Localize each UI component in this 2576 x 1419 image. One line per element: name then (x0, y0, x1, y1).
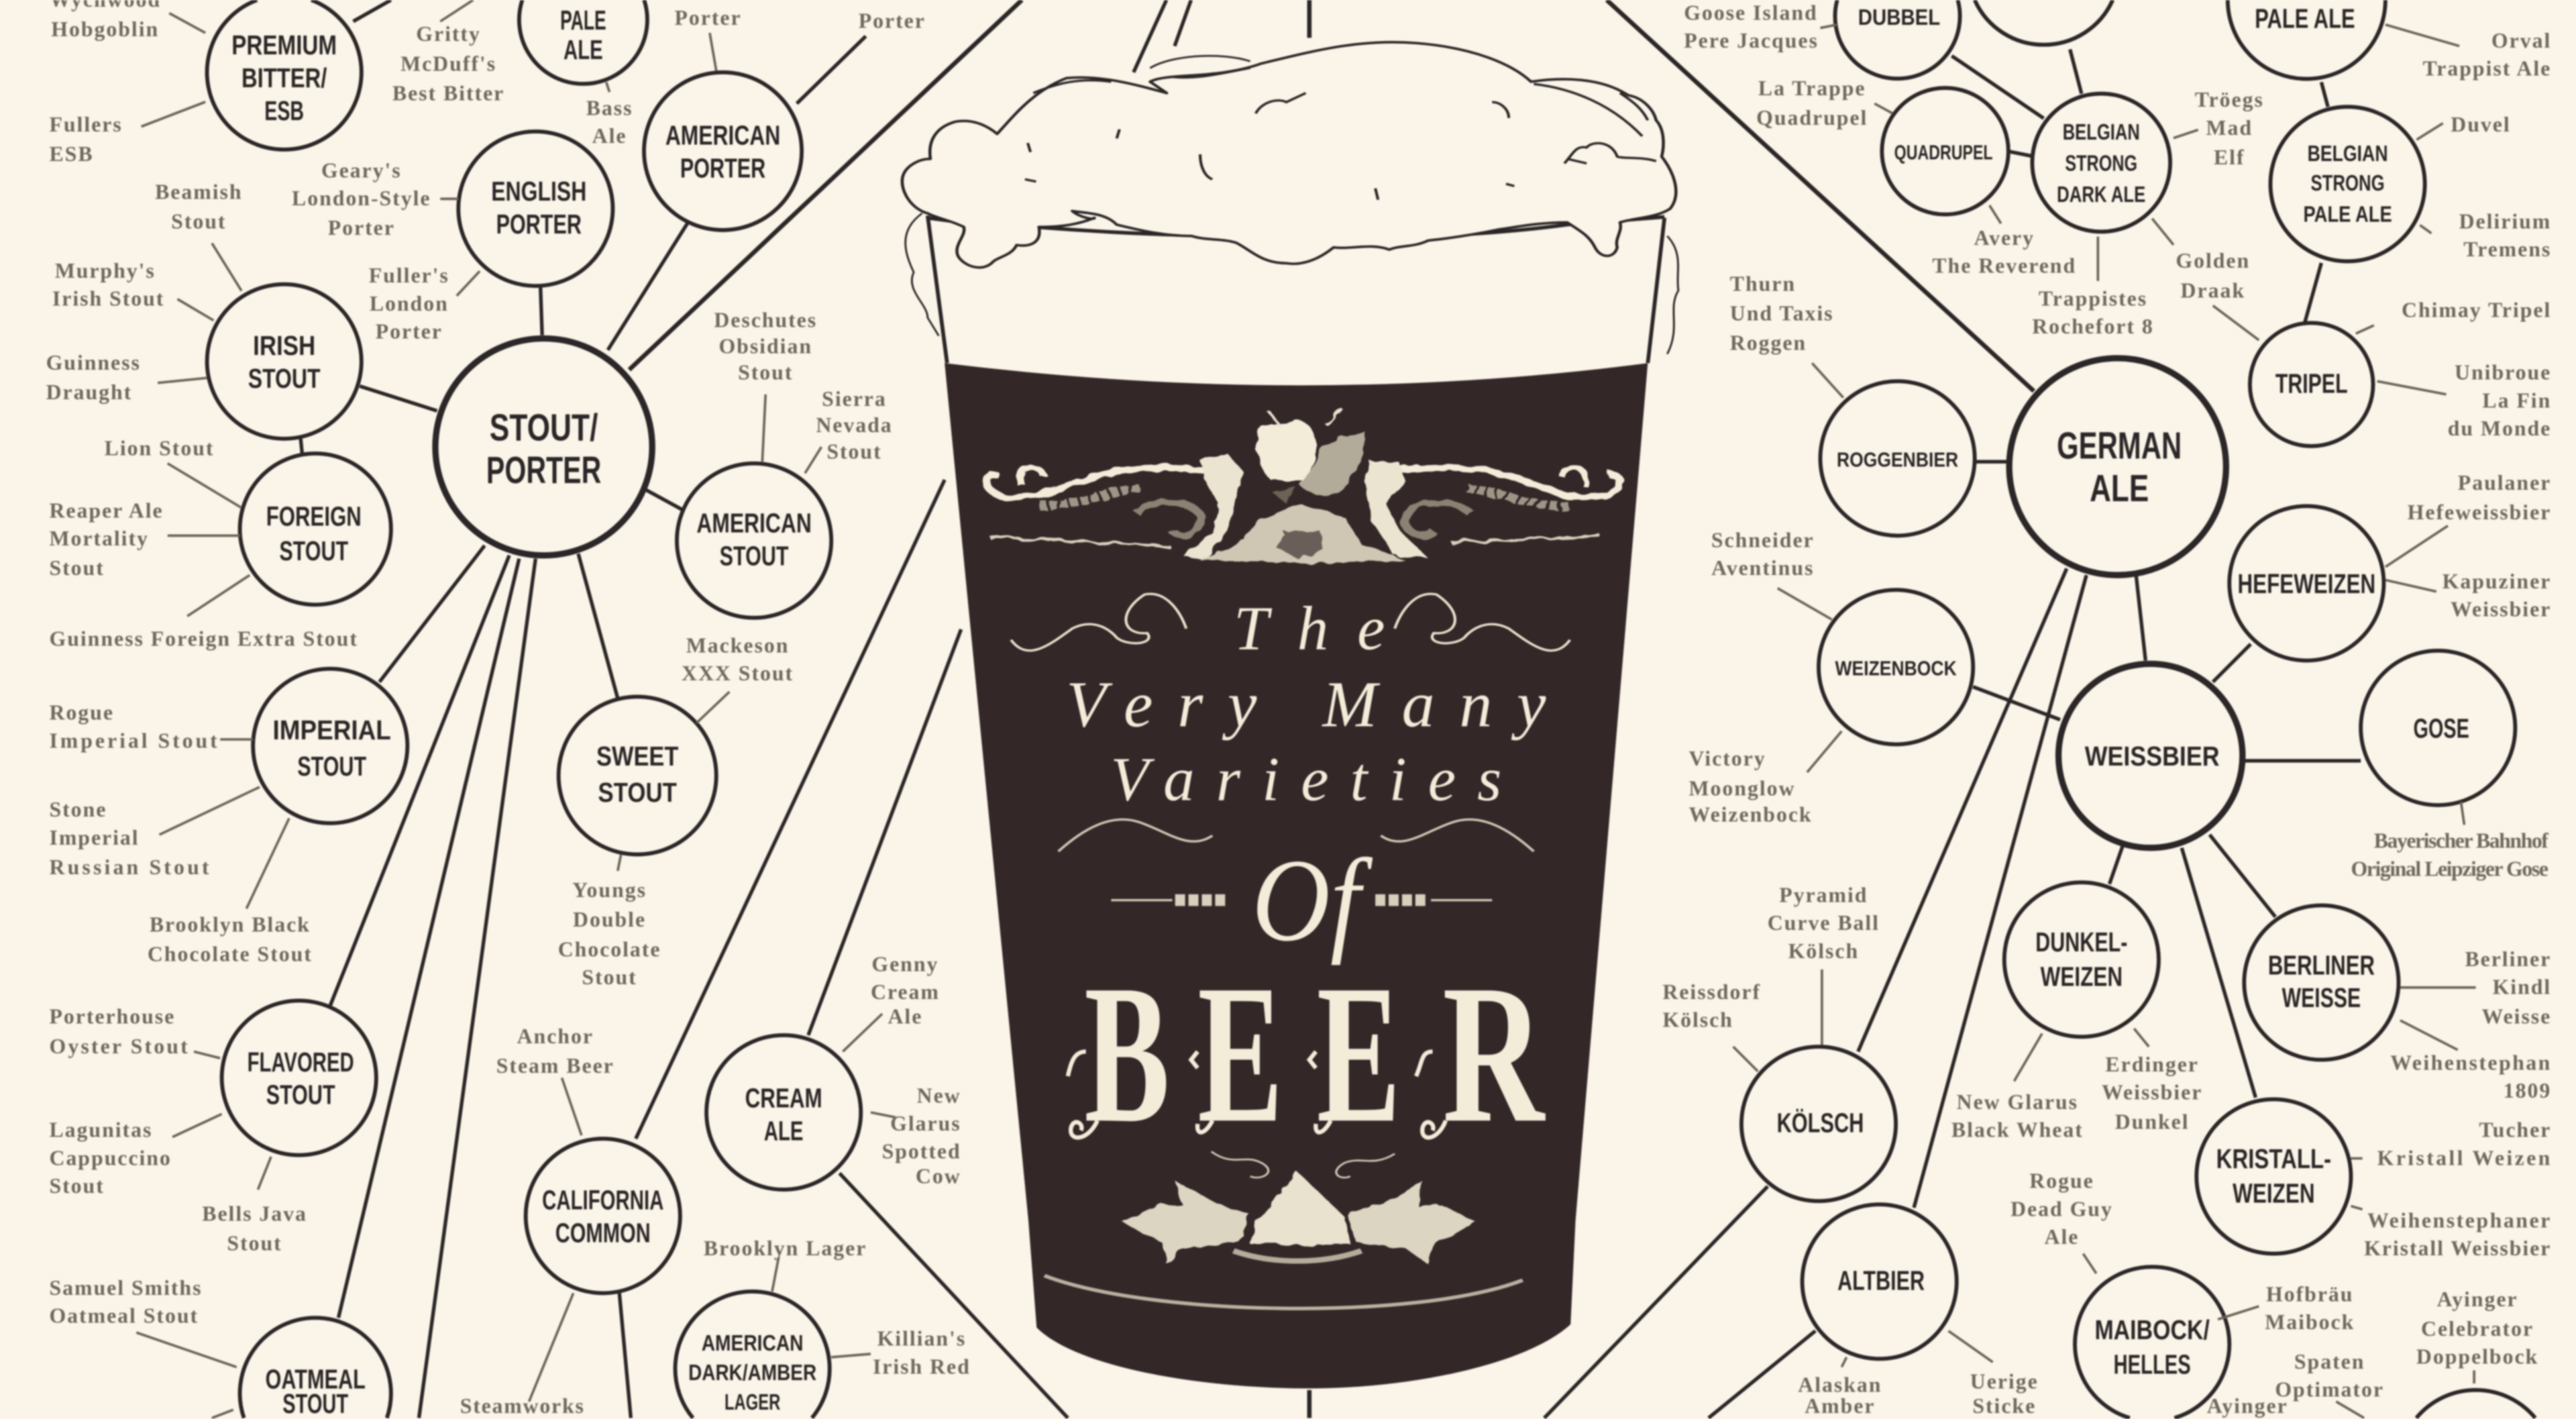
varieties: American Dark/Amber Lager: Killian's (877, 1327, 966, 1351)
node: Belgian Strong Dark Ale (1932, 88, 2264, 338)
node: Cream Ale: CREAM (745, 1083, 822, 1114)
varieties: Maibock: Dead Guy (2010, 1197, 2113, 1220)
varieties: Roggenbier: Roggen (1730, 331, 1807, 355)
varieties: Altbier: Amber (1805, 1394, 1875, 1418)
node: Weissbier hub (2059, 664, 2243, 848)
varieties: American Stout: Stout (738, 361, 793, 384)
varieties: American Porter (674, 6, 926, 70)
node: Cream Ale: ALE (764, 1116, 804, 1147)
node: American Dark/Amber Lager: DARK/AMBER (688, 1361, 816, 1385)
node: Maibock / Helles (2010, 1169, 2384, 1418)
varieties: English Porter: London (370, 292, 449, 315)
varieties: Maibock (2010, 1169, 2384, 1418)
varieties: Maibock: Rogue (2029, 1169, 2094, 1193)
varieties: Maibock: Ale (2045, 1225, 2079, 1249)
node: Altbier: ALTBIER (1837, 1265, 1925, 1296)
node: American Stout (677, 308, 893, 618)
node: Gose (2351, 651, 2550, 880)
varieties: Weizenbock (1689, 529, 1841, 827)
node: Dubbel (1684, 0, 1960, 78)
varieties: American Stout: Deschutes (714, 308, 817, 331)
varieties: Irish Stout: Draught (46, 380, 132, 404)
title text: BEER: R (1442, 944, 1546, 1164)
varieties: Sweet Stout: Chocolate (558, 937, 661, 961)
node: American Stout: STOUT (720, 540, 789, 571)
varieties: Imperial Stout: Chocolate Stout (148, 943, 313, 966)
varieties: Weizenbock: Victory (1689, 747, 1766, 770)
node: Belgian Strong Dark Ale: BELGIAN (2063, 120, 2140, 145)
varieties: Cream Ale: Cream (871, 980, 940, 1004)
node: Irish Stout: STOUT (248, 363, 321, 394)
node: Imperial Stout (49, 669, 407, 966)
node: American Dark/Amber Lager (676, 1237, 971, 1418)
varieties: Belgian Strong Dark Ale: Draak (2181, 278, 2245, 302)
varieties: American Stout: Obsidian (718, 335, 812, 358)
node: Oatmeal Stout: OATMEAL (266, 1363, 366, 1394)
icon: beer body (945, 363, 1648, 1388)
varieties: Berliner Weisse: Berliner (2465, 947, 2551, 971)
varieties: English Porter: Geary's (321, 159, 402, 182)
varieties: California Common: Steam Beer (496, 1054, 614, 1078)
title text: The Very Many Varieties: Very Many (1066, 668, 1546, 741)
varieties: Quadrupel: Quadrupel (1756, 106, 1868, 129)
varieties: Oatmeal Stout: Samuel Smiths (49, 1276, 202, 1300)
node: Kölsch (1662, 884, 1896, 1201)
varieties: Oatmeal Stout: Oatmeal Stout (49, 1304, 199, 1327)
varieties: Kölsch: Reissdorf (1662, 980, 1761, 1004)
varieties: Kristallweizen: Weihenstephaner (2367, 1208, 2551, 1232)
node: California Common: COMMON (555, 1217, 651, 1248)
node: Dunkelweizen: DUNKEL- (2035, 927, 2127, 957)
left scroll (986, 454, 1244, 560)
node: Irish Stout: IRISH (253, 330, 315, 361)
varieties: English Porter: Porter (376, 320, 443, 344)
varieties: Sweet Stout (558, 633, 794, 989)
varieties: Berliner Weisse: Kindl (2493, 976, 2551, 999)
varieties: Imperial Stout: Imperial (49, 826, 140, 849)
node: Premium Bitter / ESB: ESB (264, 95, 304, 126)
varieties: Cream Ale: Ale (888, 1005, 922, 1029)
flourishes and arrows around Of (1059, 819, 1534, 900)
varieties: Imperial Stout (49, 701, 313, 966)
varieties: Cream Ale: Glarus (890, 1112, 961, 1135)
varieties: Kölsch: Kölsch (1788, 939, 1859, 963)
node: Roggenbier (1730, 272, 1975, 535)
varieties: Belgian Strong Dark Ale: Rochefort 8 (2032, 315, 2154, 338)
varieties: Belgian Strong Dark Ale: Golden (2176, 249, 2250, 272)
node: Premium Bitter / ESB: BITTER/ (241, 62, 327, 93)
varieties: English Porter: Porter (328, 216, 395, 240)
varieties: Belgian Pale Ale: Orval (2491, 29, 2551, 52)
varieties: English Porter: Fuller's (369, 264, 449, 287)
varieties: Hefeweizen: Paulaner (2458, 471, 2551, 494)
varieties: Irish Stout: Irish Stout (52, 287, 164, 311)
varieties: Premium Bitter: McDuff's (400, 52, 496, 75)
node: Tripel (2250, 299, 2551, 446)
node: Sweet Stout: STOUT (598, 777, 677, 808)
varieties: Hefeweizen (2385, 471, 2551, 621)
node: Stout / Porter hub: PORTER (486, 449, 601, 491)
node: Flavored Stout (49, 1000, 376, 1255)
varieties: Weizenbock: Schneider (1711, 529, 1815, 552)
varieties: Irish Stout (46, 180, 243, 404)
node: Belgian Strong Pale Ale: BELGIAN (2308, 142, 2388, 166)
varieties: Foreign Stout: Reaper Ale (49, 498, 164, 522)
icon: letter spurs and curls (1068, 1051, 1446, 1138)
title text: BEER: E (1197, 944, 1283, 1164)
node: Weizenbock (1689, 529, 1973, 827)
varieties: Weizenbock: Aventinus (1711, 556, 1814, 580)
varieties: Hefeweizen: Kapuziner (2443, 570, 2551, 593)
varieties: Kristallweizen: Kristall Weissbier (2364, 1237, 2551, 1260)
varieties: California Common (460, 1024, 614, 1418)
varieties: Belgian Strong Dark Ale: Elf (2214, 146, 2245, 169)
varieties: Weizenbock: Weizenbock (1689, 803, 1813, 827)
varieties: Premium Bitter: Hobgoblin (51, 17, 159, 41)
node: German Ale hub: ALE (2090, 467, 2149, 509)
varieties: Belgian Strong Dark Ale: Mad (2206, 116, 2253, 140)
varieties: Imperial Stout: Imperial Stout (49, 729, 219, 752)
node: Pale Ale (Belgian) (2228, 0, 2551, 81)
varieties: Gose (2351, 802, 2550, 880)
varieties: Belgian Strong Dark Ale: The Reverend (1932, 254, 2076, 278)
node: Belgian Strong Pale Ale: PALE ALE (2303, 203, 2392, 227)
node: Imperial Stout: IMPERIAL (273, 715, 391, 745)
title flourishes (1011, 594, 1570, 651)
varieties: Belgian Strong Pale Ale (2213, 113, 2551, 340)
varieties: Maibock: Optimator (2275, 1378, 2384, 1402)
varieties: Kölsch: Curve Ball (1768, 911, 1880, 935)
node: Weizenbock: WEIZENBOCK (1835, 658, 1957, 680)
varieties: Berliner Weisse: 1809 (2504, 1079, 2551, 1102)
varieties: Imperial Stout: Rogue (49, 701, 114, 725)
varieties: American Dark/Amber Lager: Brooklyn Lager (704, 1237, 867, 1260)
varieties: Cream Ale: New (917, 1084, 961, 1107)
varieties: Flavored Stout (49, 1005, 307, 1255)
varieties: Roggenbier: Thurn (1730, 272, 1796, 296)
node: Maibock / Helles: HELLES (2114, 1349, 2191, 1379)
node: Dunkelweizen (1951, 882, 2202, 1142)
node: American Dark/Amber Lager: AMERICAN (702, 1331, 804, 1356)
node: American Porter (644, 6, 926, 230)
varieties: Tripel: La Fin (2482, 388, 2551, 412)
node: German Ale hub: GERMAN (2057, 424, 2182, 466)
node: Hefeweizen (2229, 471, 2551, 661)
varieties: Oatmeal Stout (49, 1276, 237, 1418)
varieties: Flavored Stout: Stout (227, 1232, 282, 1255)
varieties: Dubbel (1684, 1, 1837, 52)
varieties: American Porter: Porter (859, 9, 926, 33)
varieties: Pale Ale: Ale (592, 124, 627, 148)
varieties: Dunkelweizen: New Glarus (1957, 1090, 2078, 1114)
node: Hefeweizen: HEFEWEIZEN (2238, 568, 2375, 599)
title text: The Very Many Varieties (1066, 594, 1546, 814)
varieties: Altbier (1798, 1331, 2039, 1418)
node: Weissbier hub: WEISSBIER (2085, 741, 2220, 772)
title text: The Very Many Varieties: Varieties (1111, 745, 1501, 814)
varieties: Maibock: Ayinger (2207, 1394, 2288, 1418)
node: Belgian Strong Dark Ale: STRONG (2065, 152, 2137, 176)
varieties: American Dark/Amber Lager: Irish Red (873, 1355, 971, 1378)
node: English Porter (292, 132, 612, 344)
varieties: Premium Bitter: ESB (49, 142, 94, 166)
varieties: Weizenbock: Moonglow (1689, 776, 1795, 800)
node: Berliner Weisse: WEISSE (2282, 982, 2361, 1013)
glass of beer illustration (902, 42, 1678, 1388)
varieties: California Common: Anchor (517, 1024, 594, 1048)
varieties: Quadrupel (1756, 76, 1892, 129)
node: Dunkelweizen: WEIZEN (2041, 961, 2123, 992)
varieties: Belgian Strong Dark Ale: Tröegs (2195, 88, 2264, 111)
node: German Ale hub (2009, 358, 2226, 575)
varieties: Dubbel: Goose Island (1684, 1, 1818, 24)
node: Doppelbock (2416, 1287, 2538, 1418)
node: Foreign Stout (49, 436, 391, 650)
varieties: Foreign Stout (49, 436, 358, 650)
varieties: Roggenbier (1730, 272, 1843, 398)
varieties: Kölsch: Kölsch (1662, 1008, 1733, 1032)
varieties: Kölsch: Pyramid (1779, 884, 1868, 907)
varieties: Imperial Stout: Stone (49, 798, 107, 821)
varieties: Gose: Original Leipziger Gose (2351, 857, 2550, 880)
varieties: Belgian Pale Ale: Trappist Ale (2422, 57, 2551, 81)
node: Cream Ale (706, 952, 961, 1190)
node: American Dark/Amber Lager: LAGER (724, 1390, 780, 1415)
node: Pale Ale (English): PALE (560, 5, 606, 36)
node: Quadrupel: QUADRUPEL (1894, 142, 1993, 164)
node: Oatmeal Stout: STOUT (282, 1388, 348, 1419)
glass base highlight (1044, 1275, 1523, 1308)
title text: BEER: E (1317, 944, 1401, 1164)
varieties: Hefeweizen: Hefeweissbier (2408, 501, 2551, 524)
node: Quadrupel (1756, 76, 2008, 215)
node: American Porter: AMERICAN (665, 120, 780, 151)
varieties: Irish Stout: Murphy's (55, 259, 156, 282)
varieties: Altbier: Alaskan (1798, 1373, 1882, 1396)
varieties: Cream Ale (843, 952, 961, 1188)
varieties: Altbier: Sticke (1972, 1394, 2036, 1418)
varieties: Maibock: Maibock (2265, 1310, 2355, 1334)
varieties: Flavored Stout: Lagunitas (49, 1118, 152, 1142)
varieties: Kristallweizen (2351, 1118, 2551, 1260)
varieties: Kölsch (1662, 884, 1880, 1071)
varieties: English Porter (292, 159, 480, 344)
varieties: Tripel: du Monde (2448, 417, 2551, 440)
varieties: Quadrupel: La Trappe (1758, 76, 1866, 100)
varieties: Doppelbock: Ayinger (2437, 1287, 2518, 1311)
node: Stout / Porter hub: STOUT/ (490, 406, 598, 448)
node: Kölsch: KÖLSCH (1777, 1107, 1864, 1138)
node: Partly cropped Belgian style (1975, 0, 2112, 45)
varieties: Dunkelweizen: Black Wheat (1951, 1118, 2084, 1142)
title text: Of: Of (1252, 835, 1373, 966)
varieties: Kristallweizen: Kristall Weizen (2377, 1146, 2551, 1169)
icon: foam (902, 42, 1676, 268)
varieties: American Stout: Sierra (822, 387, 887, 411)
varieties: Belgian Strong Pale Ale: Tremens (2463, 238, 2551, 261)
varieties: Irish Stout: Beamish (155, 180, 243, 203)
node: Foreign Stout: FOREIGN (266, 501, 362, 532)
node: Altbier (1798, 1204, 2039, 1418)
node: Gose: GOSE (2414, 713, 2469, 744)
varieties: Foreign Stout: Lion Stout (105, 436, 214, 460)
varieties: Hefeweizen: Weissbier (2451, 597, 2551, 621)
varieties: Pale Ale: Bass (586, 96, 633, 119)
varieties: Belgian Strong Pale Ale: Delirium (2459, 209, 2551, 233)
node: Stout / Porter hub (435, 339, 652, 556)
varieties: Foreign Stout: Mortality (49, 527, 149, 550)
varieties: Roggenbier: Und Taxis (1730, 302, 1834, 325)
varieties: Berliner Weisse: Weihenstephan (2390, 1051, 2551, 1074)
node: Maibock / Helles: MAIBOCK/ (2094, 1314, 2210, 1345)
varieties: Dunkelweizen (1951, 1029, 2202, 1142)
varieties: Premium Bitter: Best Bitter (392, 81, 504, 105)
title text: BEER (1068, 944, 1546, 1164)
varieties: Flavored Stout: Cappuccino (49, 1146, 172, 1169)
varieties: Cream Ale: Genny (871, 952, 938, 976)
node: Belgian Strong Pale Ale (2213, 107, 2551, 340)
node: Kristallweizen: KRISTALL- (2216, 1143, 2331, 1174)
varieties: Premium Bitter (49, 0, 504, 166)
node: American Porter: PORTER (680, 153, 765, 184)
node: Pale Ale (English): ALE (564, 34, 603, 65)
varieties: American Porter: Porter (674, 6, 742, 30)
varieties: Sweet Stout: Mackeson (686, 633, 789, 657)
node: Berliner Weisse: BERLINER (2268, 949, 2375, 980)
varieties: Tripel: Unibroue (2455, 361, 2551, 384)
node: American Stout: AMERICAN (696, 508, 812, 539)
varieties: Irish Stout: Guinness (46, 351, 141, 374)
top ornament: hops and scrollwork (986, 409, 1619, 563)
node: Kristallweizen: WEIZEN (2233, 1178, 2315, 1209)
varieties: Flavored Stout: Oyster Stout (49, 1035, 189, 1058)
title text: The Very Many Varieties: The (1234, 594, 1385, 663)
varieties: Flavored Stout: Porterhouse (49, 1005, 175, 1029)
node: Oatmeal Stout (49, 1276, 391, 1419)
bottom ornament: wheat and hops bowl (1122, 1151, 1475, 1265)
varieties: American Stout: Stout (826, 439, 882, 463)
varieties: Berliner Weisse (2390, 947, 2551, 1102)
connector lines between beer families (301, 0, 2361, 1418)
node: Belgian Strong Pale Ale: STRONG (2310, 171, 2385, 196)
varieties: American Stout (714, 308, 893, 473)
node: Pale Ale (Belgian): PALE ALE (2255, 3, 2355, 34)
right scroll (1364, 461, 1619, 558)
varieties: Cream Ale: Spotted (882, 1140, 961, 1163)
varieties: Berliner Weisse: Weisse (2482, 1005, 2551, 1029)
varieties: Premium Bitter: Gritty (416, 22, 481, 46)
varieties: Belgian Strong Dark Ale: Avery (1974, 226, 2035, 250)
node: Irish Stout (46, 180, 362, 439)
varieties: California Common: Steamworks (460, 1394, 585, 1418)
varieties: Imperial Stout: Russian Stout (49, 855, 210, 879)
varieties: Foreign Stout: Stout (49, 556, 105, 580)
varieties: Sweet Stout: Youngs (572, 878, 647, 902)
node: Imperial Stout: STOUT (297, 751, 366, 782)
varieties: Tripel (2356, 299, 2551, 440)
varieties: Maibock: Spaten (2294, 1350, 2365, 1373)
node: Foreign Stout: STOUT (279, 535, 348, 566)
node: Flavored Stout: STOUT (266, 1080, 335, 1110)
varieties: Belgian Strong Pale Ale: Duvel (2451, 113, 2511, 136)
varieties: Imperial Stout: Brooklyn Black (150, 913, 311, 937)
varieties: Belgian Strong Dark Ale (1932, 88, 2264, 338)
varieties: Foreign Stout: Guinness Foreign Extra Stout (49, 627, 358, 650)
varieties: Pale Ale (586, 82, 633, 148)
node: California Common (460, 1024, 680, 1418)
varieties: Dunkelweizen: Dunkel (2115, 1110, 2190, 1133)
varieties: English Porter: London-Style (292, 187, 431, 210)
varieties: Belgian Pale Ale (2385, 25, 2551, 81)
varieties: Sweet Stout: Stout (582, 965, 637, 989)
node: English Porter: ENGLISH (491, 176, 586, 207)
icon: hops (1256, 409, 1364, 504)
varieties: Flavored Stout: Bells Java (202, 1202, 307, 1226)
node: Premium Bitter / ESB (49, 0, 504, 166)
varieties: Tripel: Chimay Tripel (2402, 299, 2551, 322)
varieties: American Stout: Nevada (816, 413, 893, 437)
node: Flavored Stout: FLAVORED (248, 1047, 354, 1078)
node: Sweet Stout: SWEET (596, 741, 679, 772)
node: Berliner Weisse (2244, 905, 2551, 1102)
varieties: Cream Ale: Cow (916, 1164, 961, 1188)
varieties: Dunkelweizen: Erdinger (2105, 1053, 2199, 1076)
varieties: Doppelbock: Celebrator (2421, 1317, 2534, 1341)
node: Pale Ale (English) (519, 0, 647, 148)
node: Belgian Strong Dark Ale: DARK ALE (2057, 182, 2145, 207)
varieties: Doppelbock: Doppelbock (2416, 1345, 2538, 1369)
varieties: Premium Bitter: Fullers (49, 113, 123, 136)
varieties: Doppelbock (2416, 1287, 2538, 1383)
varieties: Irish Stout: Stout (171, 209, 226, 233)
node: Sweet Stout (558, 633, 794, 989)
varieties: Flavored Stout: Stout (49, 1174, 105, 1198)
node: California Common: CALIFORNIA (542, 1184, 663, 1215)
node: English Porter: PORTER (496, 209, 582, 240)
varieties: Dubbel: Pere Jacques (1684, 29, 1819, 52)
varieties: Gose: Bayerischer Bahnhof (2374, 829, 2550, 853)
node: Tripel: TRIPEL (2275, 368, 2348, 399)
varieties: Maibock: Hofbräu (2266, 1283, 2353, 1306)
varieties: Kristallweizen: Tucher (2479, 1118, 2551, 1142)
varieties: Belgian Strong Dark Ale: Trappistes (2039, 287, 2147, 311)
varieties: American Dark/Amber Lager (704, 1237, 971, 1378)
node: Dubbel: DUBBEL (1858, 5, 1940, 30)
node: Premium Bitter / ESB: PREMIUM (231, 30, 337, 60)
varieties: Dunkelweizen: Weissbier (2102, 1080, 2202, 1104)
title text: BEER: B (1084, 944, 1170, 1164)
varieties: Sweet Stout: Double (573, 908, 646, 931)
varieties: Sweet Stout: XXX Stout (682, 662, 794, 685)
node: Roggenbier: ROGGENBIER (1837, 449, 1958, 472)
icon: glass outline (906, 213, 1678, 363)
varieties: Altbier: Uerige (1970, 1369, 2039, 1393)
node: Kristallweizen (2196, 1099, 2551, 1260)
